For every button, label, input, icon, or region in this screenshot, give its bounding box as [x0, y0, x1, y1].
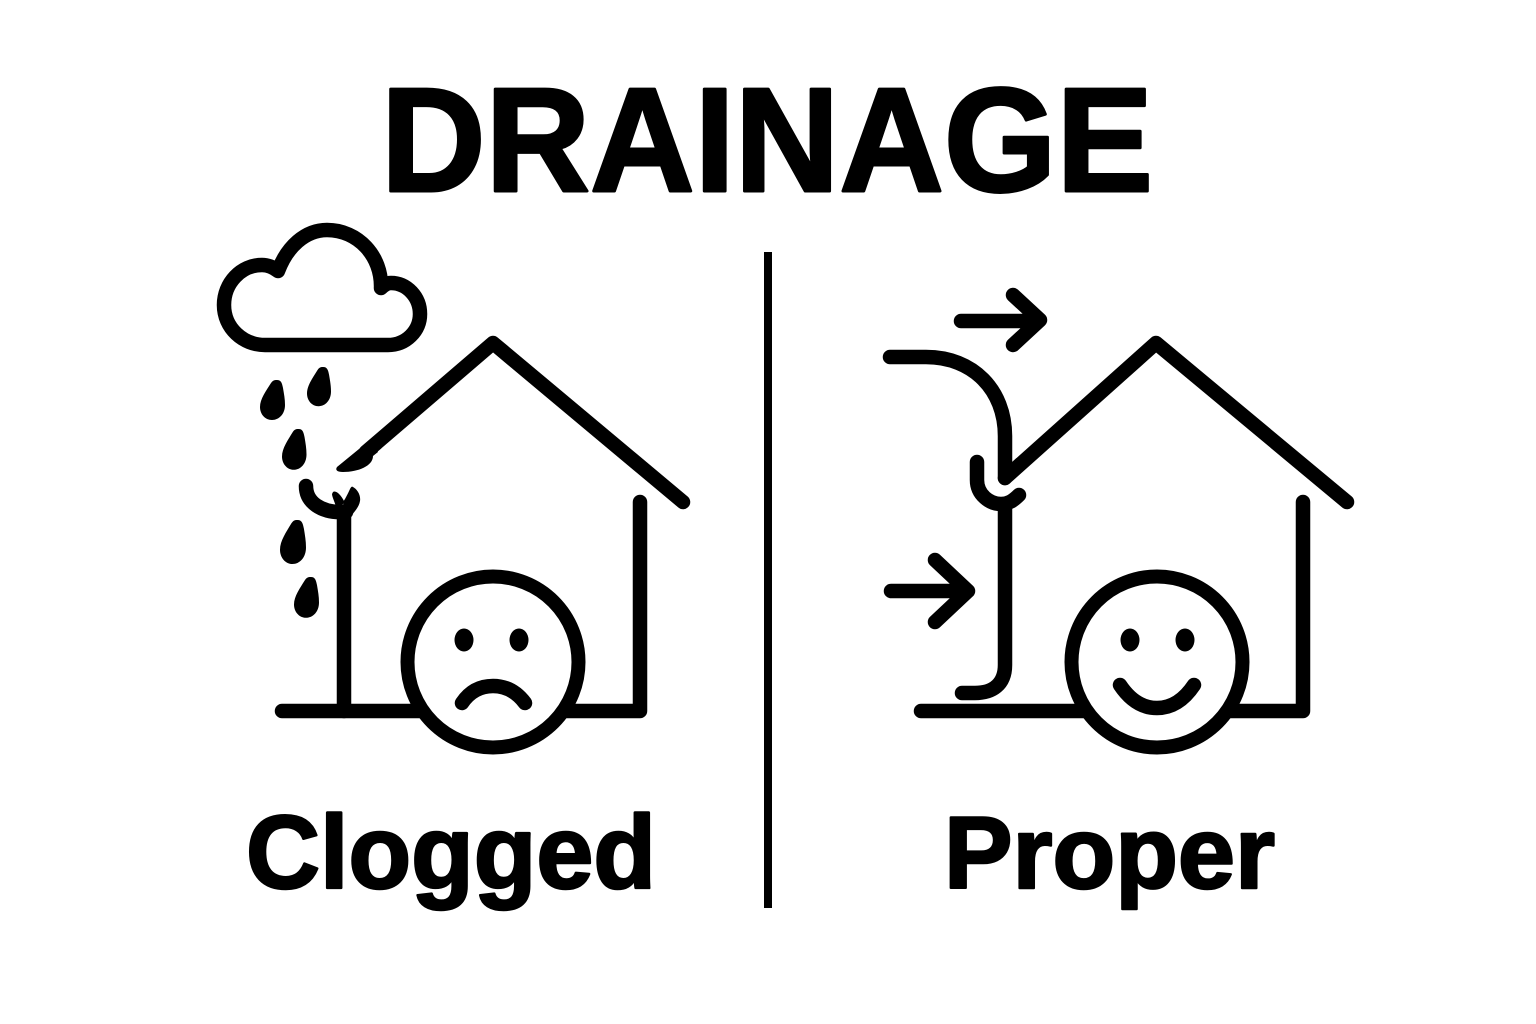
icon: happy face — [1072, 576, 1242, 748]
divider — [764, 252, 772, 908]
icon: house outline — [282, 343, 683, 711]
panel: proper drainage — [890, 295, 1347, 910]
label: clogged: Clogged — [246, 795, 656, 911]
icon: gutter and downpipe — [962, 462, 1019, 693]
icon: flow arrow top — [961, 295, 1040, 345]
icon: house outline — [921, 343, 1347, 711]
title: DRAINAGE — [381, 58, 1153, 223]
icon: roof gutter pipe — [890, 357, 1005, 478]
icon: flow arrow lower — [891, 560, 968, 622]
icon: raindrops — [260, 367, 331, 618]
panel: clogged drainage — [224, 230, 683, 911]
label: proper: Proper — [944, 796, 1275, 910]
icon: rain cloud — [224, 230, 420, 345]
icon: clogged gutter and downpipe — [306, 486, 360, 711]
icon: sad face — [408, 576, 578, 748]
